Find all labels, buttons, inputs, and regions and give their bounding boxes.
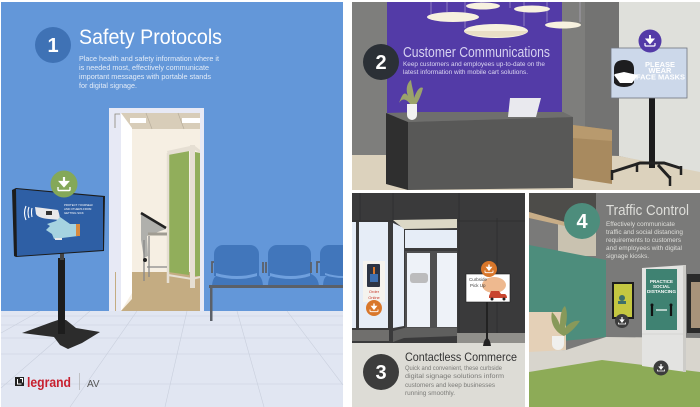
body text: customer communications — [403, 61, 545, 76]
body text: customer communications: latest information with mobile cart solutions. — [403, 69, 528, 76]
pendant lights — [427, 2, 581, 38]
screen: thermometer and gloved hand — [24, 203, 93, 240]
body text: contactless commerce: running smoothly. — [405, 390, 455, 397]
body text: safety protocols: is needed most, effectively communicate — [79, 63, 209, 72]
mobile cart stand — [611, 48, 687, 186]
heading: customer communications: Customer Communications — [403, 44, 550, 61]
body text: contactless commerce: digital signage solutions inform — [405, 373, 504, 380]
kiosk: DISTANCING — [647, 289, 677, 294]
reception desk — [386, 98, 612, 190]
panel: contactless commerce — [352, 193, 525, 407]
icon: download badge green — [50, 170, 78, 198]
waiting room chairs — [209, 245, 343, 321]
number badge 4: 4 — [576, 211, 588, 233]
plant in pot — [551, 306, 580, 350]
screen: face mask sign: WEAR — [649, 66, 672, 75]
plant in vase — [399, 80, 423, 120]
doorway — [109, 108, 204, 311]
number badge 3 — [363, 354, 399, 390]
number badge 1 — [35, 27, 71, 63]
screen: face mask sign: FACE MASKS — [636, 72, 685, 82]
exam table — [141, 213, 167, 281]
body text: traffic control: requirements to customers — [606, 237, 682, 244]
body text: traffic control: traffic and social distancing — [606, 229, 683, 236]
number badge 2: 2 — [375, 52, 387, 74]
kiosk: SOCIAL — [653, 284, 670, 289]
body text: safety protocols — [79, 54, 219, 90]
icon: download badge orange right — [481, 261, 497, 277]
wall poster: yellow — [612, 282, 634, 319]
kiosk: PRACTICE — [650, 279, 673, 284]
screen: thermometer and gloved hand: GETTING SICK — [64, 211, 84, 215]
body text: traffic control: and employees with digital — [606, 245, 683, 252]
floor — [1, 311, 343, 407]
panel: customer communications — [352, 2, 700, 190]
body text: safety protocols: important messages with portable stands — [79, 72, 211, 81]
window poster: order online — [363, 261, 385, 302]
screen: face mask sign: PLEASE — [645, 60, 675, 69]
heading: traffic control: Traffic Control — [606, 202, 689, 219]
screen: thermometer and gloved hand: PROTECT YOURSELF — [64, 203, 93, 207]
number badge 2 — [363, 44, 399, 80]
kiosk — [642, 265, 686, 372]
body text: traffic control: Effectively communicate — [606, 221, 675, 228]
window poster: order online: Order — [369, 289, 380, 294]
curbside sign — [466, 274, 510, 346]
body text: traffic control — [606, 221, 683, 260]
body text: contactless commerce: Quick and convenient, these curbside — [405, 365, 502, 372]
window poster: order online: Online — [368, 295, 381, 300]
icon: download badge purple — [638, 30, 662, 52]
number badge 1: 1 — [47, 35, 59, 57]
heading: safety protocols: Safety Protocols — [79, 26, 222, 49]
logo: legrand AV: AV — [87, 379, 100, 390]
logo: legrand AV: legrand — [27, 374, 71, 390]
body text: customer communications: Keep customers and employees up-to-date on the — [403, 61, 545, 68]
number badge 3: 3 — [375, 362, 387, 384]
body text: contactless commerce: customers and keep businesses — [405, 382, 496, 389]
background door — [687, 274, 700, 333]
storefront windows and door — [352, 219, 525, 343]
logo: legrand AV — [15, 373, 100, 390]
body text: traffic control: signage kiosks. — [606, 253, 649, 260]
curbside sign: Curbside — [469, 277, 488, 282]
screen: face mask sign — [614, 60, 685, 87]
digital signage stand — [12, 188, 105, 349]
body text: contactless commerce — [405, 365, 504, 397]
panel: traffic control — [529, 193, 700, 407]
icon: download badge orange left — [366, 300, 382, 316]
body text: safety protocols: Place health and safety information where it — [79, 54, 219, 63]
icon: download badge grey kiosk — [654, 360, 668, 376]
body text: safety protocols: for digital signage. — [79, 81, 137, 90]
curbside sign: Pick Up — [470, 283, 486, 288]
icon: download badge grey wall — [615, 314, 629, 328]
heading: contactless commerce: Contactless Commerce — [405, 350, 517, 364]
number badge 4 — [564, 203, 600, 239]
panel: safety protocols — [1, 2, 343, 407]
screen: thermometer and gloved hand: AND OTHERS FROM — [64, 207, 92, 211]
